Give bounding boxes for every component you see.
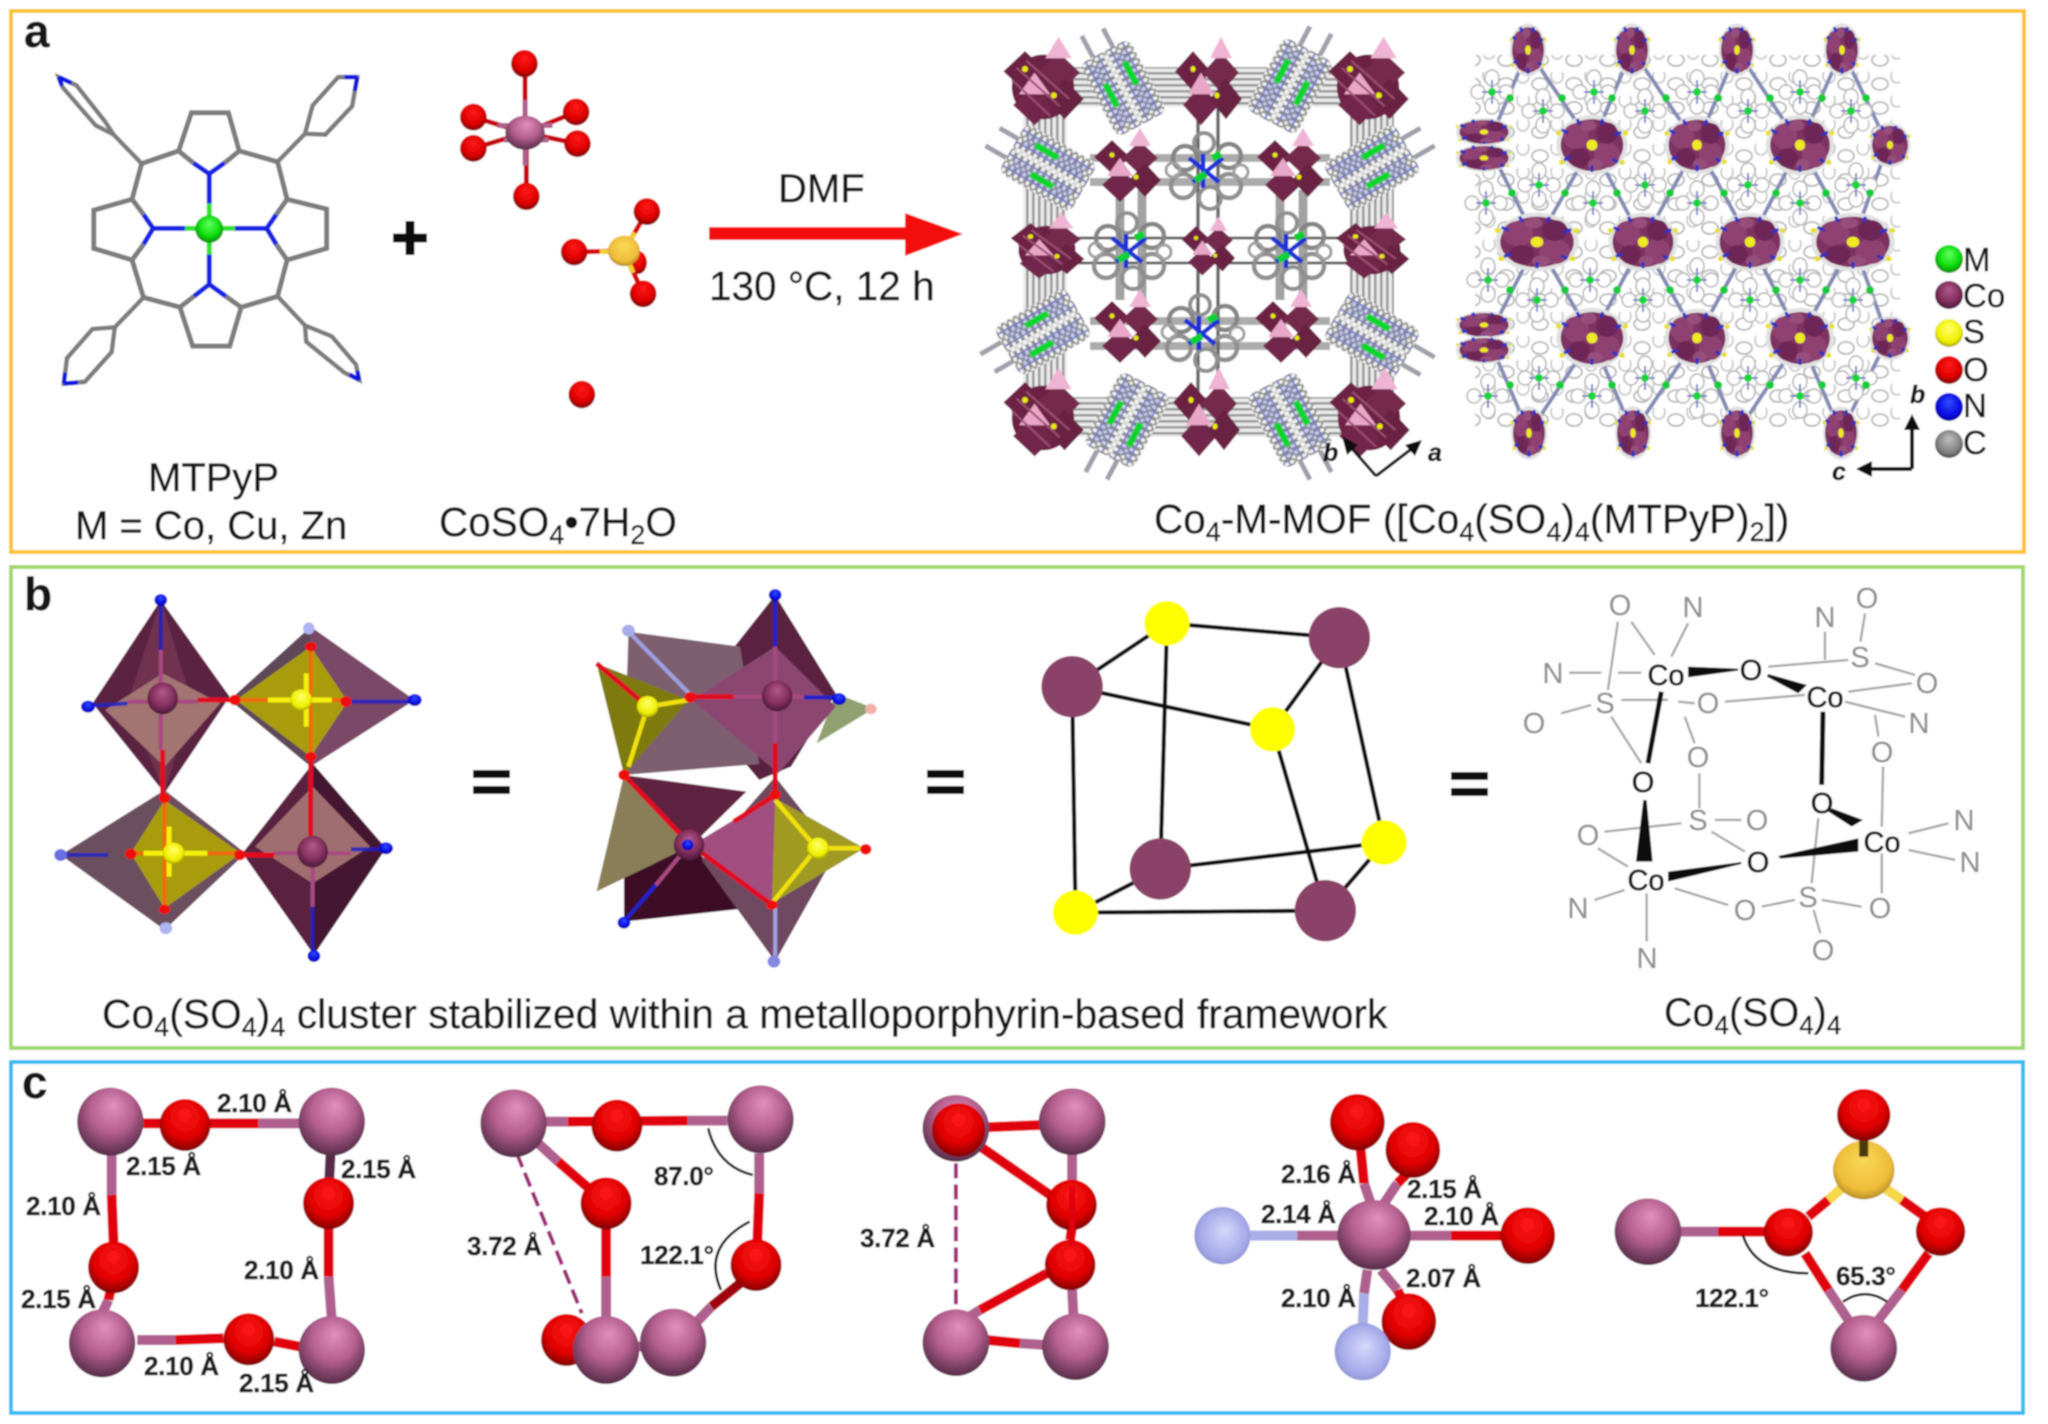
panel b: Co4(SO4)4 cluster [11, 567, 2023, 1048]
atom legend: Co [1963, 277, 2005, 314]
Co4(SO4)4 chemical scheme: O [1632, 767, 1654, 799]
cluster caption: Co [102, 991, 154, 1037]
bond lengths sphere: 2.14 Å [1261, 1199, 1336, 1229]
MOF formula caption: -M-MOF ([Co [1221, 496, 1459, 542]
bond lengths sphere: 2.15 Å [1407, 1174, 1482, 1204]
equals sign 3 [1451, 776, 1488, 792]
Co4(SO4)4 chemical scheme: O [1869, 893, 1891, 925]
DMF label: DMF [778, 167, 865, 211]
MOF formula caption: 4 [1206, 517, 1221, 547]
MOF formula caption: Co [1154, 496, 1206, 542]
labels ring 2: 3.72 Å [467, 1231, 542, 1261]
MOF view along a [1456, 23, 1911, 460]
label ring 3: 3.72 Å [860, 1223, 935, 1253]
cluster caption: cluster stabilized within a metalloporphyrin-based framework [285, 991, 1388, 1037]
axes a b for left view [1323, 436, 1442, 476]
atom legend: C [1963, 424, 1987, 461]
bond lengths sphere: 2.07 Å [1406, 1263, 1481, 1293]
bond lengths sphere: 2.10 Å [1281, 1283, 1356, 1313]
Co4(SO4)4 chemical scheme: Co [1647, 660, 1685, 692]
axes a b for left view: a [1428, 439, 1442, 467]
axes b c for right view [1832, 381, 1925, 486]
panel label c: c [22, 1056, 48, 1108]
CoSO4 label: 4 [549, 520, 564, 550]
scheme caption: (SO [1729, 991, 1799, 1035]
ball-and-stick ring 3 [923, 1088, 1109, 1380]
scheme caption: 4 [1827, 1010, 1841, 1040]
simplified cube [1041, 601, 1407, 941]
MTPyP label: MTPyP [148, 456, 279, 500]
Co4(SO4)4 chemical scheme: O [1734, 895, 1756, 927]
MOF formula caption: 4 [1575, 517, 1590, 547]
atom legend: O [1963, 351, 1989, 388]
CoSO4 label: CoSO [439, 499, 549, 545]
Co4(SO4)4 chemical scheme: O [1812, 935, 1834, 967]
CoSO4 label: •7H [564, 499, 630, 545]
panel c: geometry details [11, 1056, 2023, 1413]
bond lengths ring 1: 2.10 Å [144, 1351, 219, 1381]
panel a: MOF synthesis [11, 5, 2024, 552]
Co4(SO4)4 chemical scheme: O [1746, 805, 1768, 837]
equals sign 1 [473, 774, 510, 790]
Co4(SO4)4 chemical scheme: N [1637, 943, 1657, 975]
cluster caption: (SO [169, 991, 242, 1037]
Co4(SO4)4 chemical scheme: O [1523, 708, 1545, 740]
CoSO4 7H2O model [460, 50, 660, 408]
bond lengths ring 1: 2.10 Å [244, 1255, 319, 1285]
bond lengths ring 1: 2.15 Å [239, 1368, 314, 1398]
MOF view along c [958, 15, 1457, 491]
bond lengths ring 1: 2.15 Å [21, 1284, 96, 1314]
MTPyP label: M = Co, Cu, Zn [75, 504, 347, 548]
labels ring 2: 87.0° [654, 1161, 714, 1191]
Co coordination sphere [1194, 1094, 1555, 1380]
scheme caption: ) [1814, 991, 1827, 1035]
cluster caption: 4 [242, 1012, 257, 1042]
angle labels [1695, 1261, 1896, 1313]
Co4(SO4)4 chemical scheme: S [1798, 882, 1818, 914]
Co4(SO4)4 chemical scheme: N [1960, 847, 1980, 879]
reaction conditions: 130 °C, 12 h [709, 263, 935, 309]
axes b c for right view: b [1910, 381, 1925, 409]
labels ring 2 [467, 1161, 714, 1270]
Co4(SO4)4 chemical scheme: O [1740, 655, 1762, 687]
Co4(SO4)4 chemical scheme: O [1747, 847, 1769, 879]
atom legend [1935, 241, 2005, 461]
Co4(SO4)4 chemical scheme [1523, 583, 1980, 975]
Co4(SO4)4 chemical scheme: S [1850, 642, 1870, 674]
polyhedra view 2 [597, 589, 877, 968]
axes b c for right view: c [1832, 458, 1846, 486]
sulfate bridge [1615, 1089, 1965, 1382]
atom legend: N [1963, 387, 1987, 424]
Co4(SO4)4 chemical scheme: O [1856, 583, 1878, 615]
Co4(SO4)4 chemical scheme: Co [1627, 865, 1665, 897]
Co4(SO4)4 chemical scheme: S [1595, 688, 1615, 720]
Co4(SO4)4 chemical scheme: O [1609, 590, 1631, 622]
bond lengths sphere [1261, 1159, 1499, 1313]
panel label b: b [24, 568, 52, 620]
Co4(SO4)4 chemical scheme: O [1687, 742, 1709, 774]
axes a b for left view: b [1323, 439, 1338, 467]
MTPyP porphyrin structure [59, 77, 359, 384]
CoSO4 label: O [645, 499, 677, 545]
Co4(SO4)4 chemical scheme: N [1815, 602, 1835, 634]
plus sign [393, 221, 427, 255]
Co4(SO4)4 chemical scheme: N [1543, 658, 1563, 690]
MOF formula caption: 2 [1750, 517, 1765, 547]
bond lengths sphere: 2.10 Å [1424, 1201, 1499, 1231]
scheme caption: 4 [1799, 1010, 1814, 1040]
Co4(SO4)4 chemical scheme: O [1697, 688, 1719, 720]
MOF formula caption: 4 [1546, 517, 1561, 547]
cluster caption: 4 [270, 1012, 285, 1042]
Co4(SO4)4 chemical scheme: Co [1863, 827, 1901, 859]
Co4(SO4)4 chemical scheme: N [1954, 805, 1974, 837]
angle labels: 65.3° [1836, 1261, 1896, 1291]
Co4(SO4)4 chemical scheme: O [1811, 788, 1833, 820]
Co4(SO4)4 chemical scheme: S [1688, 805, 1708, 837]
bond lengths ring 1: 2.15 Å [341, 1154, 416, 1184]
bond lengths ring 1 [21, 1088, 416, 1398]
bond lengths ring 1: 2.10 Å [26, 1191, 101, 1221]
Co4(SO4)4 chemical scheme: O [1871, 737, 1893, 769]
scheme caption: 4 [1714, 1010, 1729, 1040]
cluster caption: ) [257, 991, 270, 1037]
scheme caption: Co [1664, 991, 1714, 1035]
MOF formula caption: (SO [1474, 496, 1546, 542]
polyhedra view 1 [54, 594, 422, 962]
Co4(SO4)4 chemical scheme: N [1909, 708, 1929, 740]
bond lengths ring 1: 2.10 Å [217, 1088, 292, 1118]
bond lengths sphere: 2.16 Å [1281, 1159, 1356, 1189]
Co4(SO4)4 chemical scheme: Co [1806, 682, 1844, 714]
equals sign 2 [927, 774, 964, 790]
MOF formula caption: ]) [1765, 496, 1789, 542]
Co4(SO4)4 chemical scheme: O [1916, 668, 1938, 700]
labels ring 2: 122.1° [640, 1240, 714, 1270]
Co4(SO4)4 chemical scheme: N [1568, 893, 1588, 925]
angle labels: 122.1° [1695, 1283, 1769, 1313]
cluster caption: 4 [154, 1012, 169, 1042]
MOF formula caption: (MTPyP) [1590, 496, 1750, 542]
Co4(SO4)4 chemical scheme: O [1577, 820, 1599, 852]
MOF formula caption: 4 [1459, 517, 1474, 547]
ball-and-stick ring 2 [480, 1085, 794, 1384]
CoSO4 label: 2 [630, 520, 645, 550]
bond lengths ring 1: 2.15 Å [126, 1151, 201, 1181]
panel label a: a [24, 5, 50, 57]
atom legend: M [1963, 241, 1990, 278]
ball-and-stick ring 1 [69, 1088, 365, 1384]
Co4(SO4)4 chemical scheme: N [1683, 592, 1703, 624]
reaction arrow [709, 213, 963, 256]
MOF formula caption: ) [1561, 496, 1575, 542]
atom legend: S [1963, 313, 1985, 350]
